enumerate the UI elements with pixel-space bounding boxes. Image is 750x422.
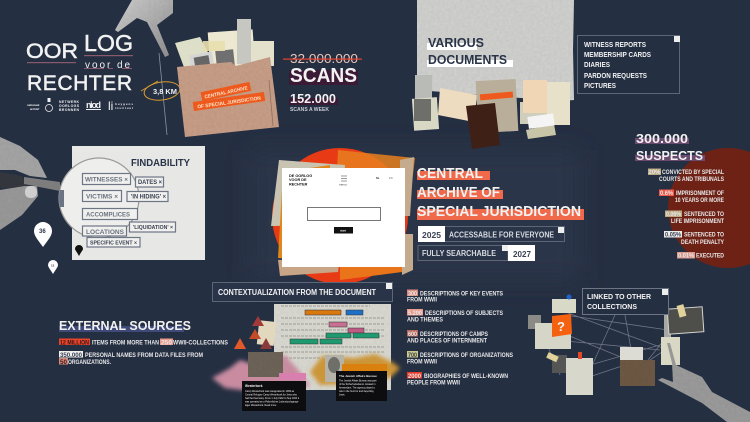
timeline: 2025 accessable (418, 226, 564, 242)
splash: pink highlight with photo (212, 352, 310, 391)
tooltip: Westerbork: had fled Germany. From 1 July 1942 to Sep 1944 it (245, 397, 299, 400)
text: description counts: PEOPLE FROM WWII (407, 380, 460, 386)
window (282, 168, 405, 267)
stat: scans: 32.000.000 (290, 51, 358, 66)
icon: small map pin: 12 (51, 264, 55, 268)
illustration: archive search window: EN (389, 176, 393, 180)
stats: verdicts: DEATH PENALTY (681, 240, 724, 246)
icon: map pin 36: 36 (39, 229, 46, 235)
illustration: archive search window: menu (339, 182, 347, 186)
icon: small map pin (48, 260, 58, 274)
partner logos: NETWERK (59, 100, 80, 104)
icon: folder with documents (175, 19, 279, 137)
network: linked collection lines (545, 310, 680, 380)
stats: verdicts: COURTS AND TRIBUNALS (659, 177, 724, 183)
text: external sources stats: 350.000 (60, 353, 83, 359)
stats: verdicts: LIFE IMPRISONMENT (671, 219, 724, 225)
text: description counts: DESCRIPTIONS OF SUBJECTS (425, 311, 503, 317)
heading: central archive of special jurisdiction: ARCHIVE OF (417, 184, 500, 201)
panel: findability: SPECIFIC EVENT × (90, 240, 137, 246)
panel: findability: DATES × (138, 180, 162, 186)
illustration: archive search window: start (340, 228, 346, 232)
stat: scans: SCANS A WEEK (290, 107, 329, 113)
icon: pointing hand (top) (115, 0, 173, 57)
panel: annotated document (274, 304, 391, 390)
icon: diary (466, 103, 500, 149)
panel: various documents: DOCUMENTS (428, 52, 507, 67)
heading box: linked to other collections: COLLECTIONS (587, 302, 637, 311)
panel: findability: LOCATIONS (86, 230, 124, 236)
text: description counts: DESCRIPTIONS OF CAMPS (420, 332, 488, 338)
search tags (82, 174, 176, 247)
partner logos (27, 98, 133, 113)
text: external sources stats: WWII-COLLECTIONS (173, 340, 228, 346)
logo: Oorlog voor de Rechter: RECHTER (27, 72, 132, 95)
logo: Oorlog voor de Rechter: voor de (85, 60, 130, 71)
partner logos: archief (30, 107, 39, 111)
text: external sources stats: PERSONAL NAMES FROM DATA FILES FROM (85, 353, 203, 359)
icon: magnifier lens (59, 158, 139, 238)
text: description counts: FROM WWII (407, 298, 437, 304)
stats: verdicts: 0.6% (660, 191, 674, 197)
text: external sources stats: ITEMS FROM MORE THAN (92, 340, 159, 346)
partner logos: BRONNEN (59, 108, 80, 112)
stats: verdicts: IMPRISONMENT OF (676, 191, 724, 197)
icon: black map pin (75, 245, 83, 256)
text: description counts: AND PLACES OF INTERNMENT (407, 338, 487, 344)
panel: findability (59, 146, 205, 260)
heading box: contextualization from the document: CONTEXTUALIZATION FROM THE DOCUMENT (218, 288, 376, 297)
list: document types: WITNESS REPORTS (584, 42, 646, 49)
icon: pointing hand (bottom right) (658, 343, 750, 422)
logo: Oorlog voor de Rechter (26, 30, 133, 95)
panel: findability: 'LIQUIDATION' × (133, 225, 173, 231)
list: document types: PICTURES (584, 83, 616, 90)
illustration: archive search window: DE OORLOG (289, 174, 312, 178)
icon: orange question note: ? (557, 319, 565, 334)
text: description counts: BIOGRAPHIES OF WELL-KNOWN (424, 374, 508, 380)
stat: 300.000 suspects (635, 131, 705, 163)
list: document types: MEMBERSHIP CARDS (584, 52, 651, 59)
panel: findability: WITNESSES × (85, 178, 129, 184)
text: description counts: 5.200 (408, 311, 423, 317)
stats: verdicts: 0.05% (665, 232, 682, 238)
text: description counts: DESCRIPTIONS OF KEY EVENTS (420, 292, 503, 298)
stats: verdicts (648, 168, 725, 260)
heading box: linked to other collections (582, 288, 668, 314)
illustration: archive search window (271, 148, 415, 284)
tooltip: The Jewish Affairs Bureau: Jews. (339, 394, 345, 396)
tooltip: The Jewish Affairs Bureau: The Jewish Affairs Bureau was part (339, 380, 377, 382)
icon: map pin 36 (34, 222, 52, 247)
timeline: 2025 accessable: ACCESSABLE FOR EVERYONE (449, 230, 555, 240)
callout: 3.8 km (141, 80, 181, 102)
heading box: linked to other collections: LINKED TO OTHER (587, 292, 652, 301)
stats: verdicts: 0.01% (678, 254, 695, 260)
text: external sources stats: 250 (161, 340, 173, 346)
callout: 3.8 km: 3,8 KM (153, 89, 177, 96)
splash: orange highlight with portrait (310, 354, 400, 385)
stats: verdicts: 20% (648, 170, 661, 176)
stat: 300.000 suspects: 300.000 (636, 131, 688, 146)
text: description counts: 700 (408, 353, 418, 359)
panel: findability: VICTIMS × (86, 194, 119, 200)
heading: external sources: EXTERNAL SOURCES (59, 318, 191, 333)
panel: findability: ACCOMPLICES (86, 212, 130, 218)
partner logos: nationaal (27, 103, 40, 107)
text: external sources stats: ORGANIZATIONS. (68, 360, 111, 366)
illustration: archive search window: NL (376, 176, 380, 180)
text: description counts: 600 (408, 332, 418, 338)
circle: suspects background (668, 148, 750, 268)
list: document types: PARDON REQUESTS (584, 73, 647, 80)
tooltip: Westerbork: Central Refugee Camp Westerbork for Jews who (245, 394, 298, 396)
partner logos: instituut (115, 106, 133, 110)
heading: central archive of special jurisdiction: SPECIAL JURISDICTION (417, 203, 581, 220)
icon: red push pin (578, 352, 582, 359)
partner logos: OORLOGS (59, 104, 80, 108)
tooltip: The Jewish Affairs Bureau: of the Sicherheitsdienst, located in (339, 383, 376, 386)
illustration: archive search window: RECHTER (289, 182, 308, 186)
collage: linked documents (528, 294, 704, 395)
timeline: 2025 accessable: 2025 (422, 230, 441, 240)
text: description counts: AND THEMES (407, 318, 443, 324)
list: document types: DIARIES (584, 62, 610, 69)
logo: Oorlog voor de Rechter: OOR (26, 40, 78, 63)
text: external sources stats: 12 MILLION (60, 340, 89, 346)
panel: findability: FINDABILITY (131, 158, 190, 169)
icon: hand with magnifier (0, 137, 60, 230)
heading box: contextualization from the document (212, 282, 392, 302)
logo: Oorlog voor de Rechter: LOG (84, 30, 133, 56)
text: description counts: 2000 (408, 374, 422, 380)
timeline: fully searchable 2027: FULLY SEARCHABLE (422, 249, 497, 258)
panel: various documents (417, 0, 574, 101)
tooltip: The Jewish Affairs Bureau: Amsterdam. The agency played a (339, 386, 375, 390)
tooltip: The Jewish Affairs Bureau (336, 364, 387, 401)
text: description counts (407, 290, 513, 386)
panel: findability: 'IN HIDING' × (131, 194, 166, 200)
partner logos: li (108, 99, 113, 113)
timeline: fully searchable 2027: 2027 (513, 249, 531, 259)
heading: central archive of special jurisdiction: CENTRAL (417, 165, 483, 182)
stats: verdicts: EXECUTED (696, 254, 725, 260)
tooltip: Westerbork: Camp Westerbork was inaugurated in 1939 as (245, 390, 295, 393)
text: description counts: FROM WWII (407, 360, 437, 366)
tooltip: Westerbork: Westerbork (245, 384, 263, 388)
icon: blue push pin (566, 294, 572, 300)
label: central archive: CENTRAL ARCHIVE (204, 85, 249, 100)
timeline: fully searchable 2027 (418, 245, 535, 261)
icon: orange question note (552, 314, 572, 337)
partner logos: niod (86, 100, 101, 110)
stat: scans: 152.000 (290, 91, 336, 106)
list: document types (578, 36, 680, 94)
tooltip: The Jewish Affairs Bureau: The Jewish Affairs Bureau (339, 374, 377, 378)
stat: scans: SCANS (290, 65, 357, 87)
distance line (159, 53, 167, 135)
stats: verdicts: 0.06% (666, 212, 682, 218)
stat: 300.000 suspects: SUSPECTS (636, 148, 703, 163)
label: of special jurisdiction: OF SPECIAL JURISDICTION (197, 96, 262, 110)
stats: verdicts: CONVICTED BY SPECIAL (662, 170, 724, 176)
stat: scans (283, 51, 362, 113)
tooltip: Westerbork: was operated as a Polizeiliches Judendurchgangs- (245, 400, 299, 404)
text: description counts: 300 (408, 292, 418, 298)
tooltip: Westerbork (242, 373, 306, 411)
text: external sources stats (59, 338, 228, 366)
text: external sources stats: 50 (60, 360, 68, 366)
stats: verdicts: SENTENCED TO (684, 232, 724, 238)
partner logos: huygens (115, 102, 133, 106)
small collage: markers and letter (234, 316, 276, 349)
document collage (412, 75, 570, 149)
stats: verdicts: SENTENCED TO (684, 212, 724, 218)
heading: central archive of special jurisdiction (417, 165, 584, 220)
text: description counts: DESCRIPTIONS OF ORGANIZATIONS (420, 353, 513, 359)
tooltip: Westerbork: lager Westerbork. Read more (245, 404, 277, 407)
tooltip: The Jewish Affairs Bureau: role in the hunt for and deporting (339, 390, 374, 393)
panel: various documents: VARIOUS (428, 35, 484, 50)
illustration: archive search window: VOOR DE (289, 178, 307, 182)
stats: verdicts: 10 YEARS OR MORE (675, 198, 724, 204)
